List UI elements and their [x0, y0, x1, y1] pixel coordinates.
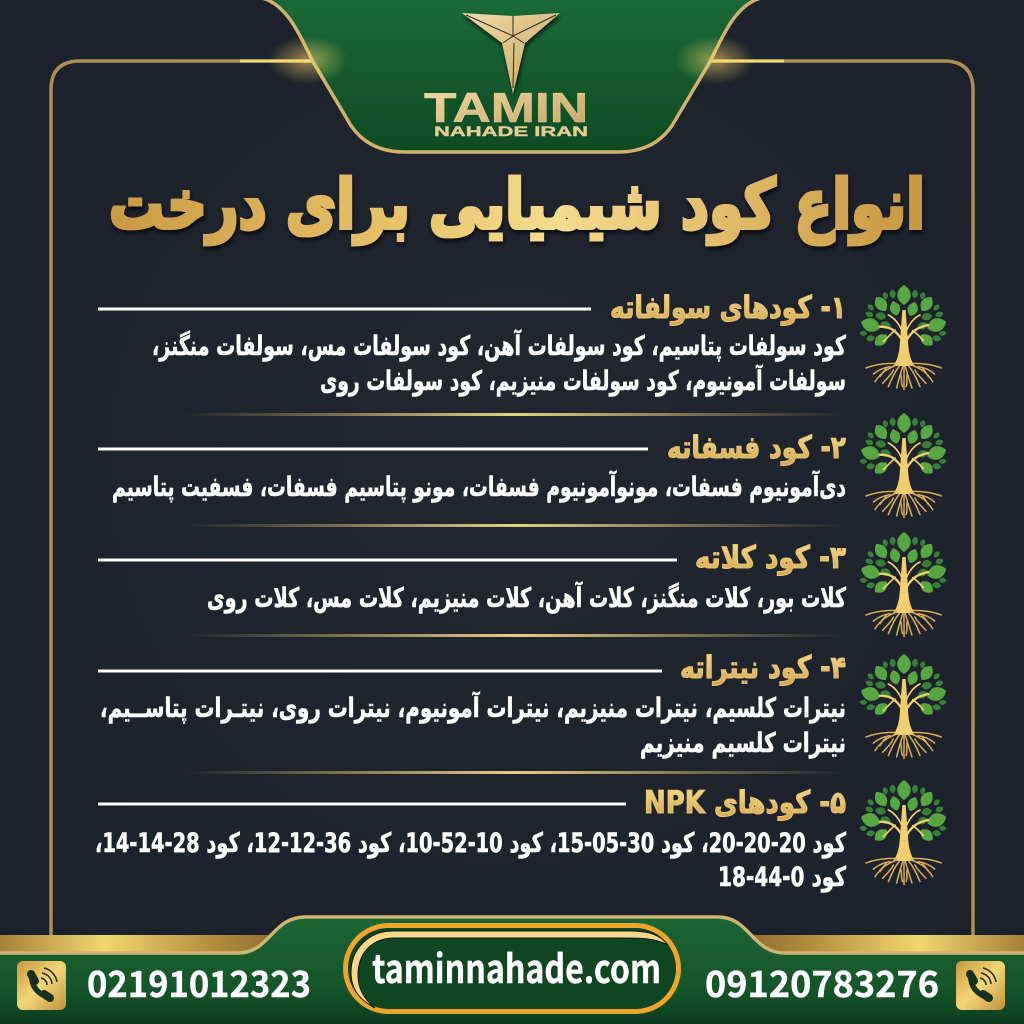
heading 2: ۲- کود فسفاته: [667, 430, 846, 466]
logo wordmark NAHADE IRAN: NAHADE IRAN: [434, 123, 588, 139]
website pill: [346, 926, 678, 1012]
frame highlight: [240, 60, 784, 62]
tree icon 5: [859, 780, 948, 884]
footer gold band left: [0, 935, 300, 955]
heading 3 rule: [98, 558, 677, 562]
phone number right: 09120783276: [705, 956, 939, 1008]
footer green panel: [0, 917, 1024, 1024]
header badge: [262, 0, 761, 152]
tree icon 3: [859, 532, 948, 636]
phone icon right: [956, 961, 1005, 1010]
tree icon 1: [859, 285, 948, 389]
section 3: chelate: [98, 532, 948, 636]
website address: taminnahade.com: [372, 939, 661, 995]
heading 1 rule: [98, 308, 591, 310]
separator 1: [185, 413, 845, 416]
section 4: nitrate: [98, 650, 948, 759]
heading 5: ۵- کودهای NPK: [644, 785, 846, 821]
section 5: NPK: [95, 780, 948, 893]
body 5 line 2: کود 0-44-18: [718, 862, 846, 893]
body 5 line 1: کود 20-20-20، کود 30-05-15، کود 10-52-10، کود 36-12-12، کود 28-14-14،: [95, 828, 846, 859]
heading 4: ۴- کود نیتراته: [680, 650, 846, 686]
separator 2: [185, 524, 845, 527]
phone icon left: [17, 961, 66, 1010]
heading 5 rule: [98, 802, 626, 806]
logo wordmark TAMIN: TAMIN: [424, 84, 588, 131]
phone number left: 02191012323: [87, 956, 311, 1008]
heading 2 rule: [98, 448, 648, 450]
heading 1: ۱- کودهای سولفاته: [610, 290, 846, 326]
gold frame: [51, 61, 973, 936]
logo emblem: [462, 13, 560, 94]
heading 4 rule: [98, 670, 662, 672]
section 2: phosphate: [98, 413, 948, 517]
section 1: sulfate: [98, 285, 948, 397]
heading 3: ۳- کود کلاته: [695, 540, 846, 576]
separator 3: [185, 634, 845, 637]
tree icon 2: [859, 413, 948, 517]
footer gold band right: [724, 935, 1024, 955]
body 4 line 2: نیترات کلسیم منیزیم: [640, 728, 846, 759]
frame glow left: [268, 36, 348, 84]
tree icon 4: [859, 654, 948, 758]
separator 4: [185, 771, 845, 774]
frame glow right: [675, 36, 755, 84]
